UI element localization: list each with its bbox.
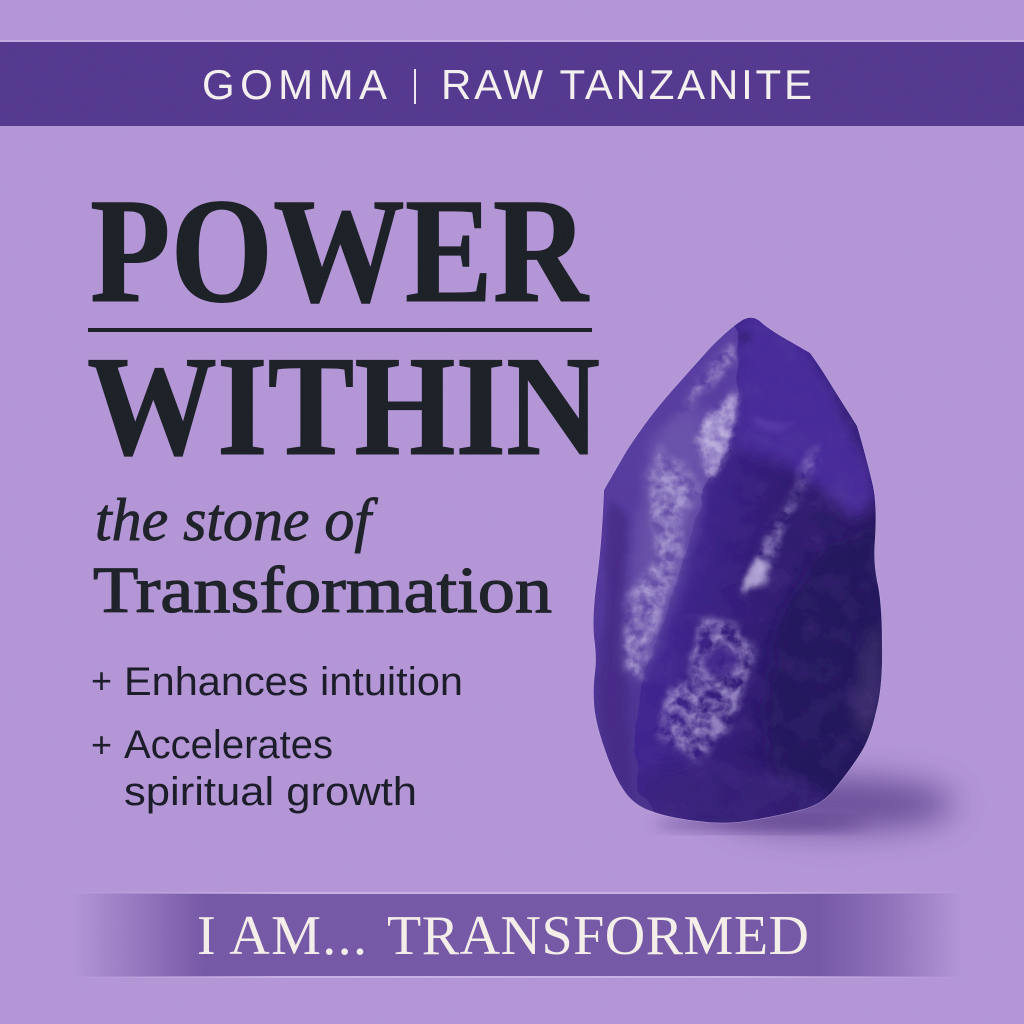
header text: product: RAW TANZANITE [441,61,812,108]
highlight: middle streak [740,447,818,595]
benefit 1: + [91,660,112,701]
header band [0,40,1024,126]
title rule [88,328,592,332]
benefit 2: spiritual growth [124,770,417,814]
highlight: streak tip [742,558,770,594]
top notch [738,333,752,343]
title word: power: POWER [90,168,589,334]
stone body [593,318,882,823]
affirmation band [0,892,1024,978]
main dark face [634,318,882,823]
highlight: left streak [623,447,703,679]
raw tanzanite stone [593,317,882,824]
header divider [414,69,416,104]
subtitle [93,487,552,627]
benefit 2 [91,723,417,814]
left facet [585,322,738,825]
deep shadow side [764,542,881,786]
stone mottling [652,416,875,788]
highlight: upper left streak [674,341,740,418]
highlight: lower ring patch [657,616,758,763]
left facet dark edge [598,502,630,773]
stone edge [593,318,882,823]
upper face glow [735,310,880,520]
bottom shade [640,772,828,822]
ring dark centre [703,647,737,677]
affirmation text: transformed: TRANSFORMED [387,905,809,967]
subtitle main line: Transformation [93,554,552,627]
benefits list [91,660,463,814]
header text: brand: GOMMA [202,61,387,108]
affirmation text: i am: I AM... [197,905,367,967]
title word: within: WITHIN [87,327,600,485]
benefit 1: Enhances intuition [124,660,463,704]
main title [87,168,600,485]
stone shadow [655,778,955,831]
brow ridge [756,419,786,430]
subtitle italic line: the stone of [95,487,378,553]
benefit 2: + [91,724,112,765]
highlight: upper bright patch [697,391,738,482]
highlight: left wash [622,400,705,680]
right rim lighter [850,628,882,738]
benefit 2: Accelerates [124,723,333,767]
